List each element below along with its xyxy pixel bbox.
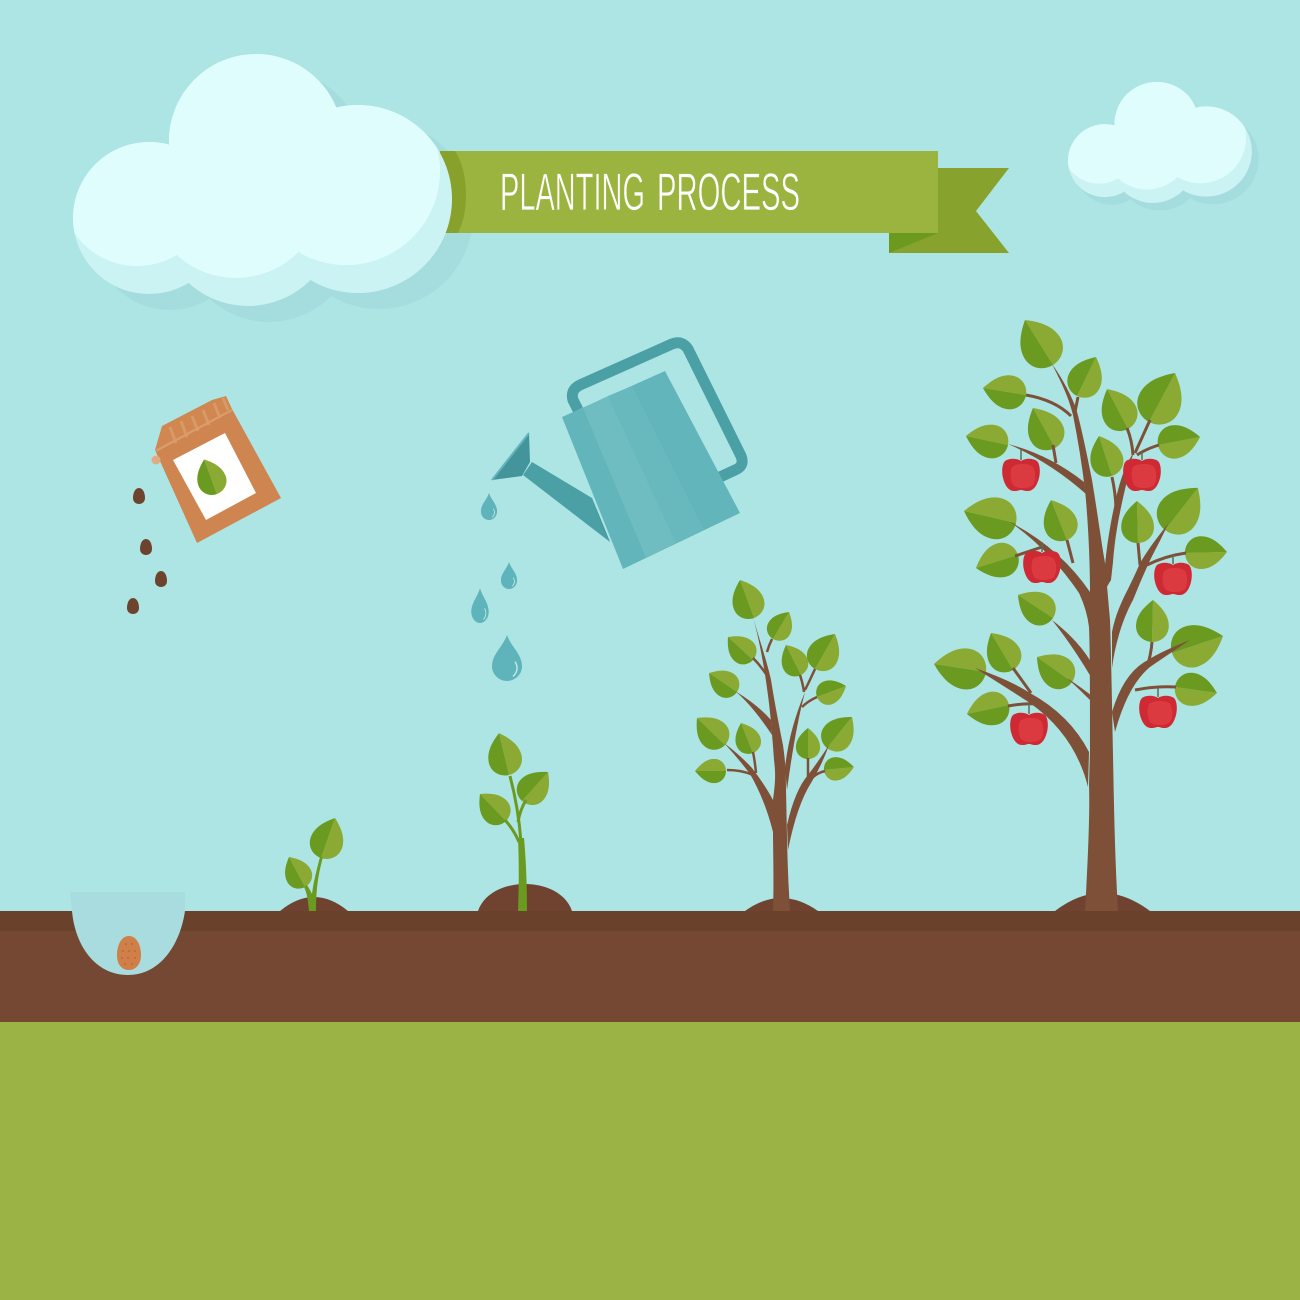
stage 1: seed in soil bbox=[70, 892, 185, 975]
small cloud bbox=[1062, 68, 1259, 211]
title: PROCESS bbox=[657, 163, 800, 222]
trunk and branches bbox=[975, 364, 1190, 911]
mound bbox=[478, 884, 572, 911]
watering can bbox=[492, 343, 742, 569]
large cloud shadow bbox=[94, 70, 473, 322]
seed bbox=[117, 936, 141, 970]
water drops bbox=[471, 493, 522, 681]
ribbon fold bbox=[889, 233, 938, 253]
title: PLANTING bbox=[500, 163, 645, 222]
ribbon tail bbox=[889, 168, 1009, 253]
leaves bbox=[931, 309, 1230, 730]
sky background bbox=[0, 0, 1300, 911]
mound bbox=[280, 897, 348, 911]
title ribbon bbox=[440, 151, 1009, 253]
soil band bbox=[0, 911, 1300, 1022]
packet body bbox=[155, 409, 281, 543]
can body bbox=[562, 371, 740, 569]
ribbon main band bbox=[440, 151, 938, 233]
large cloud bbox=[61, 26, 452, 306]
leaves bbox=[277, 813, 351, 893]
packet crimped top bbox=[155, 396, 232, 450]
apples bbox=[1002, 459, 1192, 745]
stage 5: apple tree bbox=[931, 309, 1230, 911]
trunk and branches bbox=[724, 617, 829, 911]
grass band bbox=[0, 1022, 1300, 1300]
cloud shadow on ribbon bbox=[440, 151, 466, 233]
seed packet bbox=[152, 396, 281, 543]
twigs bbox=[727, 639, 825, 778]
packet leaf icon bbox=[191, 454, 231, 499]
mound bbox=[1055, 893, 1150, 911]
stem bbox=[505, 776, 527, 911]
apple stems bbox=[1021, 450, 1173, 714]
leaves bbox=[686, 575, 864, 783]
seed texture bbox=[121, 943, 136, 965]
falling seeds bbox=[127, 488, 167, 614]
soil hole bbox=[70, 892, 185, 975]
leaves bbox=[469, 729, 559, 831]
packet pour hole bbox=[152, 456, 160, 464]
can rose bbox=[492, 433, 530, 480]
can spout bbox=[523, 462, 610, 542]
mound bbox=[745, 898, 818, 911]
stage 3: seedling bbox=[469, 729, 572, 911]
stage 2: small sprout bbox=[277, 813, 351, 911]
stage 4: young tree bbox=[686, 575, 864, 911]
can handle bbox=[572, 343, 742, 477]
twigs bbox=[1008, 395, 1186, 706]
packet label bbox=[173, 433, 256, 520]
stem bbox=[304, 857, 323, 911]
